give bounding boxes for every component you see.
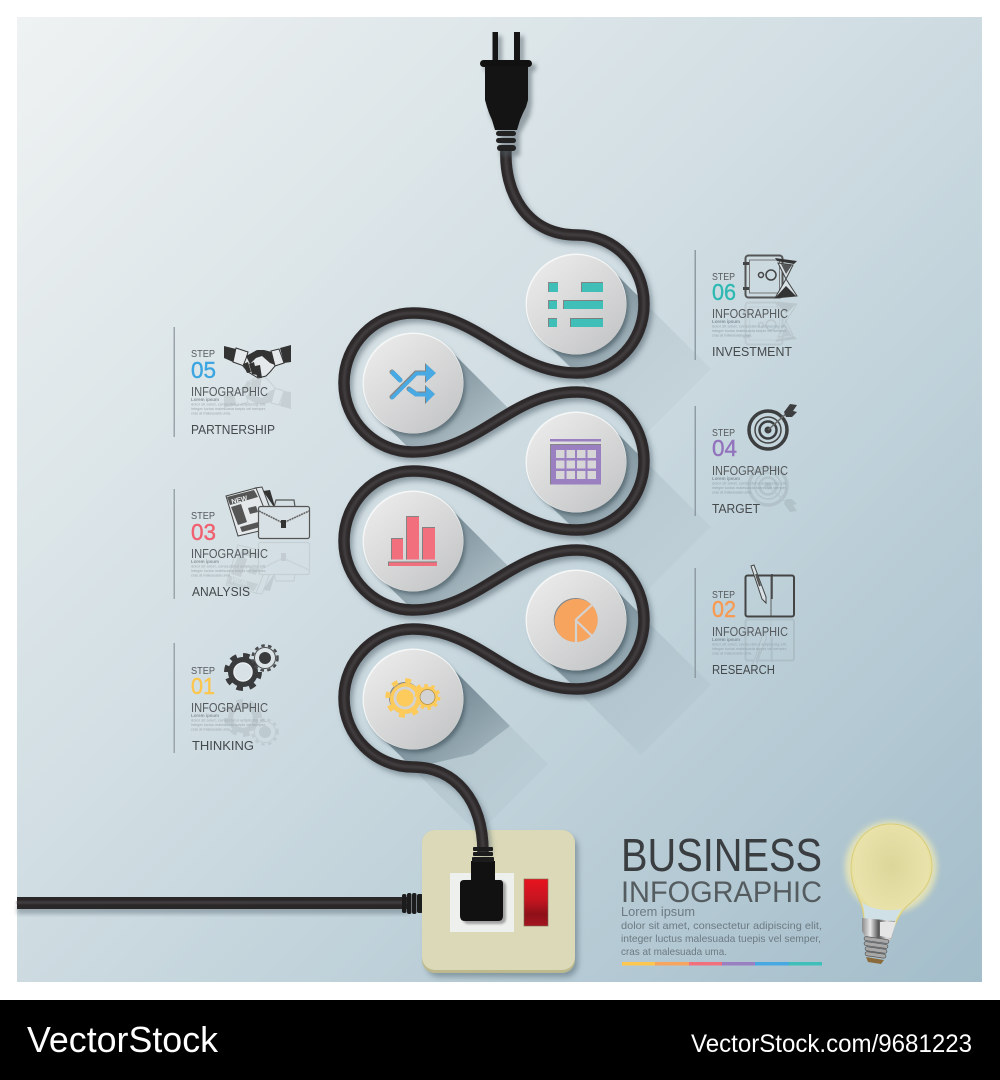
- step circle 4: calendar icon: [526, 412, 628, 516]
- icon: newspaper and briefcase: [226, 487, 310, 538]
- step circle 2: pie chart icon: [526, 570, 628, 674]
- colour bar: [622, 962, 822, 966]
- step circle 5: shuffle icon: [362, 332, 466, 436]
- icon: gears: [226, 646, 278, 688]
- heading: infographic: INFOGRAPHIC: [621, 876, 822, 909]
- step text: INFOGRAPHIC: [191, 701, 268, 715]
- top plug: [480, 32, 536, 156]
- step text: cras at malesuada uma.: [712, 650, 752, 656]
- step text: INFOGRAPHIC: [191, 547, 268, 561]
- step 03 analysis: [174, 487, 310, 599]
- socket: [450, 873, 514, 932]
- body text: cras at malesuada uma.: [621, 946, 727, 958]
- step text: [191, 547, 268, 599]
- step text: [712, 625, 788, 677]
- icon: shuffle arrows: [392, 363, 436, 404]
- icon: book and pen: [746, 565, 794, 616]
- step number: 05: [191, 357, 216, 383]
- step text: Lorem ipsum: [712, 476, 740, 481]
- step text: THINKING: [192, 739, 254, 753]
- step text: INVESTMENT: [712, 345, 792, 359]
- step circle 3: bar chart icon: [362, 490, 466, 594]
- step number: STEP: [712, 428, 735, 439]
- reflection: [749, 467, 797, 512]
- step number: STEP: [191, 511, 215, 522]
- step number: STEP: [191, 349, 215, 360]
- step text: dolor sit amet, consectetur adipiscing elit,: [712, 642, 787, 646]
- step number: 03: [191, 519, 216, 545]
- heading: business: BUSINESS: [621, 829, 822, 881]
- icon: safe and hourglass: [743, 256, 797, 298]
- reflection: [224, 376, 291, 409]
- body text: [621, 905, 822, 958]
- step circle 1: gears icon: [362, 648, 466, 752]
- step text: integer luctus malesuada tuepis vel semper,: [712, 485, 787, 490]
- icon: target: [749, 404, 797, 449]
- step text: dolor sit amet, consectetur adipiscing elit,: [712, 480, 787, 486]
- step text: ANALYSIS: [192, 585, 250, 599]
- step text: Lorem ipsum: [712, 319, 740, 324]
- horizontal power cable: [17, 893, 423, 914]
- step text: integer luctus malesuada tuepis vel semper,: [191, 568, 266, 573]
- light bulb: [845, 821, 937, 964]
- step text: Lorem ipsum: [191, 559, 219, 564]
- step text: Lorem ipsum: [712, 637, 740, 642]
- step number: STEP: [191, 666, 215, 677]
- step 02 research: [694, 565, 794, 678]
- step text: INFOGRAPHIC: [712, 464, 788, 478]
- step text: cras at malesuada uma.: [191, 572, 231, 578]
- step text: cras at malesuada uma.: [712, 332, 752, 338]
- socket plug: [460, 847, 506, 924]
- icon: bar chart: [388, 516, 437, 566]
- title block: [621, 829, 822, 966]
- step number: STEP: [712, 272, 735, 283]
- step 01 thinking: [174, 643, 278, 753]
- icon: list: [548, 282, 603, 327]
- step text: cras at malesuada uma.: [191, 410, 231, 416]
- icon: pie chart: [554, 598, 598, 643]
- step text: PARTNERSHIP: [191, 423, 275, 437]
- step text: [712, 307, 792, 359]
- reflection: [226, 542, 310, 594]
- wall outlet: [422, 830, 578, 977]
- step 05 partnership: [174, 327, 291, 437]
- winding cable: [344, 150, 647, 856]
- step text: dolor sit amet, consectetur adipiscing elit,: [191, 718, 266, 722]
- step text: Lorem ipsum: [191, 397, 219, 402]
- icon: handshake: [224, 345, 291, 378]
- step text: RESEARCH: [712, 663, 775, 677]
- step text: INFOGRAPHIC: [191, 385, 268, 399]
- step text: dolor sit amet, consectetur adipiscing elit,: [712, 324, 787, 328]
- step 04 target: [694, 404, 797, 516]
- step text: [712, 464, 788, 516]
- step text: INFOGRAPHIC: [712, 307, 788, 321]
- icon: gears: [388, 680, 439, 716]
- step text: Lorem ipsum: [191, 713, 219, 718]
- step text: cras at malesuada uma.: [191, 726, 231, 732]
- step text: dolor sit amet, consectetur adipiscing elit,: [191, 564, 266, 568]
- body text: integer luctus malesuada tuepis vel semper,: [621, 933, 821, 945]
- step 06 investment: [694, 250, 797, 360]
- reflection: [746, 620, 794, 671]
- footer logo: VectorStock: [27, 1019, 219, 1060]
- reflection: [226, 702, 278, 744]
- step number: 06: [712, 279, 736, 305]
- step text: [191, 701, 268, 753]
- long shadows of circles: [378, 269, 711, 834]
- step text: integer luctus malesuada tuepis vel semper,: [712, 328, 787, 333]
- step circle 6: list icon: [526, 254, 628, 358]
- footer bar: [0, 1000, 1000, 1080]
- step text: dolor sit amet, consectetur adipiscing elit,: [191, 402, 266, 406]
- step text: integer luctus malesuada tuepis vel semper,: [191, 406, 266, 411]
- step text: cras at malesuada uma.: [712, 490, 752, 494]
- step text: TARGET: [712, 502, 760, 516]
- step text: integer luctus malesuada tuepis vel semper,: [191, 722, 266, 727]
- step text: [191, 385, 275, 437]
- step number: 01: [191, 673, 215, 699]
- footer url: VectorStock.com/9681223: [691, 1030, 972, 1058]
- body text: dolor sit amet, consectetur adipiscing elit,: [621, 920, 822, 932]
- step number: STEP: [712, 590, 735, 601]
- step number: 04: [712, 435, 737, 461]
- step text: INFOGRAPHIC: [712, 625, 788, 639]
- reflection: [743, 302, 797, 344]
- red switch: [524, 879, 548, 926]
- step number: 02: [712, 596, 736, 622]
- icon: calendar: [550, 439, 601, 484]
- body text: Lorem ipsum: [621, 905, 695, 919]
- step text: integer luctus malesuada tuepis vel semper,: [712, 646, 787, 651]
